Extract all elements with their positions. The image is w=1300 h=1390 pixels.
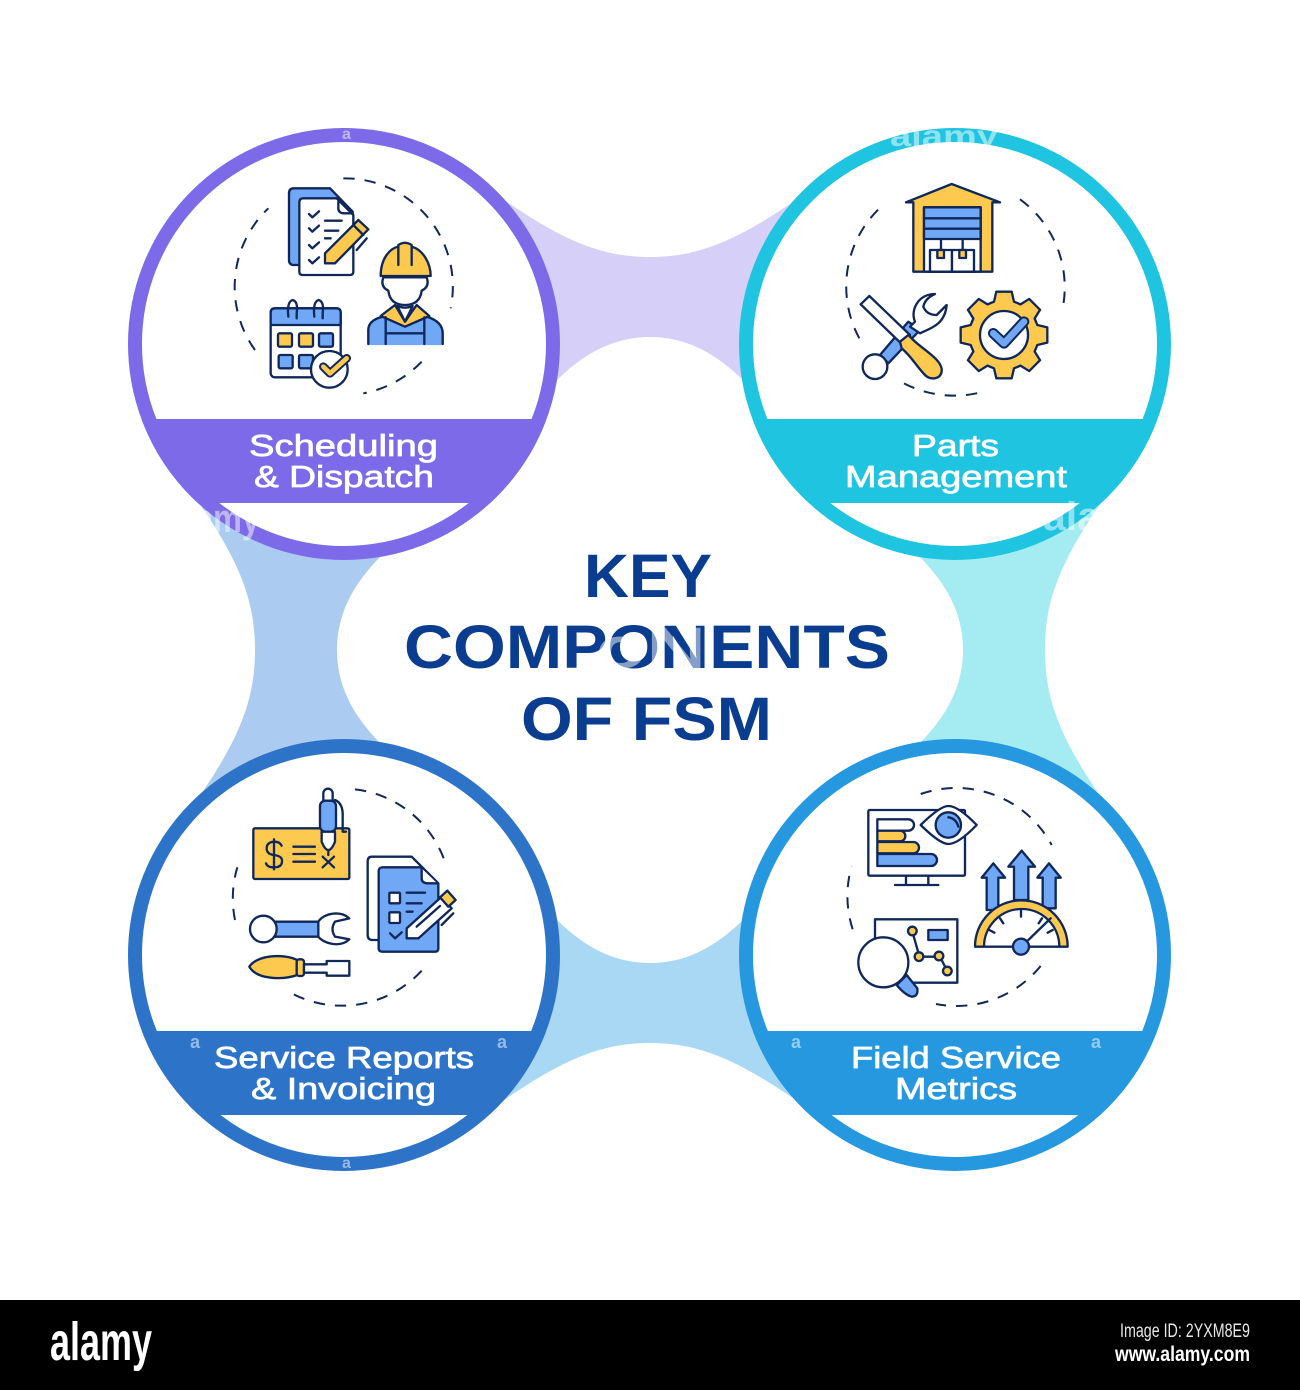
watermark ghosts: a [497, 1032, 508, 1052]
title: KEY [584, 542, 712, 610]
label [214, 1040, 474, 1106]
ring [746, 135, 1164, 553]
ring [746, 746, 1164, 1164]
label: & Invoicing [251, 1071, 436, 1106]
connector: top purple [490, 190, 810, 382]
panel: parts management [730, 135, 1180, 553]
watermark ghosts: a [190, 1032, 201, 1052]
website: www.alamy.com [1114, 1343, 1250, 1366]
watermark ghosts: alamy [890, 120, 998, 153]
label: Service Reports [214, 1040, 474, 1075]
watermark ghosts: oN [596, 616, 706, 681]
label band [120, 419, 570, 503]
watermark ghosts: a [342, 1155, 351, 1172]
title [404, 542, 890, 753]
connector: left blue [190, 490, 382, 810]
label: Scheduling [249, 428, 438, 463]
title: OF FSM [521, 685, 772, 753]
label band [120, 1031, 570, 1115]
icon cluster: documents, worker, calendar [235, 178, 453, 393]
watermark ghosts: a [791, 1032, 802, 1052]
label: Parts [912, 428, 999, 463]
connector: bottom light blue [490, 918, 810, 1110]
title: COMPONENTS [404, 613, 890, 681]
icon cluster: monitor, gauge, magnifier [847, 788, 1068, 1006]
label: & Dispatch [254, 459, 434, 494]
icon cluster: warehouse, tools, gear [846, 184, 1065, 396]
label: Metrics [895, 1071, 1017, 1106]
label band [730, 1031, 1180, 1115]
panel: service reports and invoicing [120, 746, 570, 1164]
watermark ghosts: amy [195, 497, 261, 541]
label [845, 428, 1067, 494]
ring [135, 746, 553, 1164]
label: Field Service [851, 1040, 1061, 1075]
watermark ghosts [190, 120, 1102, 1172]
ring [135, 135, 553, 553]
watermark ghosts: ala [1043, 495, 1101, 539]
icon cluster: cheque, tools, report [233, 789, 456, 1006]
label band [730, 419, 1180, 503]
footer logo: alamy [50, 1312, 152, 1372]
label [851, 1040, 1061, 1106]
connector: right teal [918, 490, 1110, 810]
watermark ghosts: a [1091, 1032, 1102, 1052]
panel: field service metrics [730, 746, 1180, 1164]
image id: Image ID: 2YXM8E9 [1120, 1321, 1250, 1342]
label [249, 428, 438, 494]
label: Management [845, 459, 1067, 494]
watermark ghosts: a [342, 126, 351, 143]
panel: scheduling and dispatch [120, 135, 570, 553]
footer bar [0, 1300, 1300, 1390]
